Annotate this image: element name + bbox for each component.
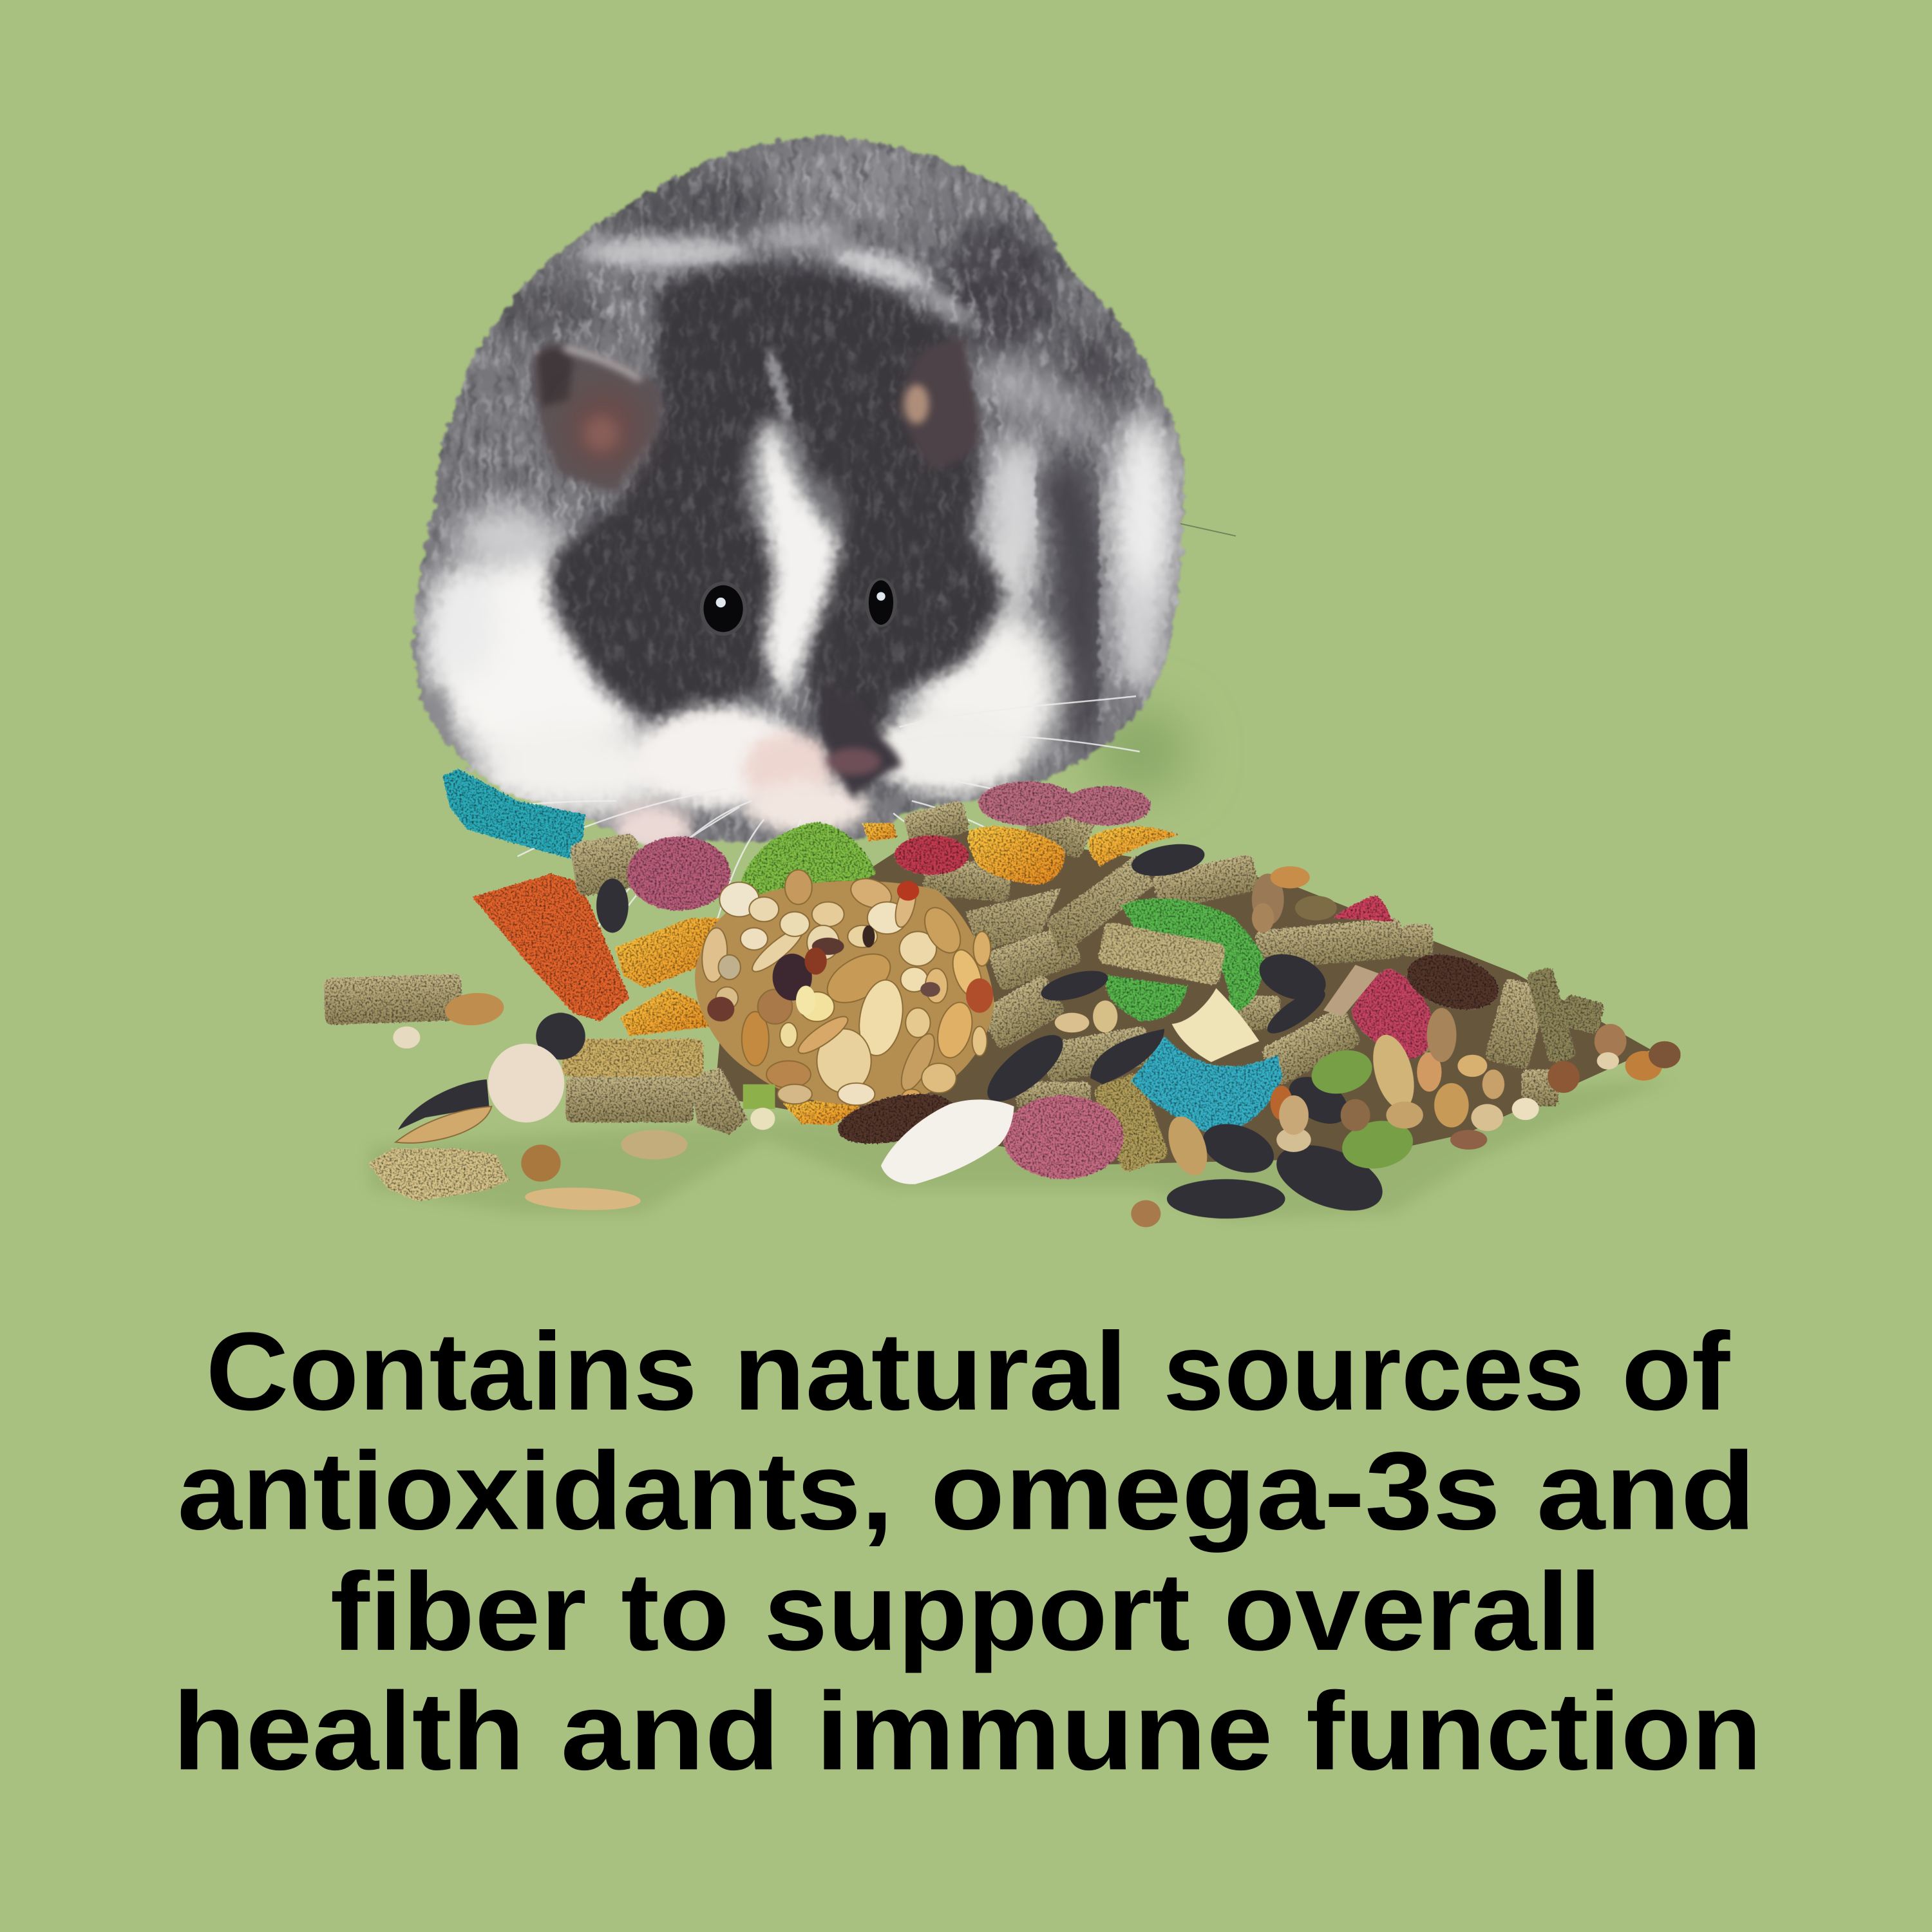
pellet over green piece [1097, 922, 1226, 986]
orange wedge [472, 874, 630, 1021]
golden pellet [562, 1039, 703, 1077]
nose bridge [819, 689, 902, 801]
black seeds [398, 839, 1391, 1224]
caption line 2 [178, 1429, 1756, 1553]
red top piece [1333, 895, 1392, 922]
caption line 3: fiber [330, 1550, 587, 1674]
white forehead blaze [762, 419, 838, 700]
fur streaks [394, 123, 1208, 862]
white striped seed [881, 1099, 1014, 1184]
raisins [833, 945, 1504, 1153]
right side dark stripe [1054, 462, 1082, 739]
hamster shadow [1090, 708, 1189, 795]
pea [488, 1044, 564, 1122]
cream piece [1172, 988, 1259, 1062]
thin forehead streak [769, 351, 788, 419]
pellets [323, 796, 1605, 1174]
pale patches across back [579, 236, 752, 269]
teal C piece [1131, 1036, 1283, 1133]
pale mottling around blaze [744, 419, 808, 542]
caption line 1: of [1622, 1310, 1730, 1434]
upper back shading [604, 166, 776, 240]
right cheek white [909, 606, 1062, 774]
caption line 4: function [1306, 1669, 1762, 1793]
caption line 4 [173, 1669, 1762, 1793]
caption line 2: omega-3s [931, 1429, 1501, 1553]
caption line 1: Contains [206, 1310, 697, 1434]
green seeds [743, 1044, 1417, 1174]
right ear [897, 336, 980, 469]
lower edge grey [419, 687, 448, 755]
caption line 3 [330, 1550, 1602, 1674]
left white belly [429, 542, 656, 776]
pile base [715, 826, 1651, 1164]
loose tan seeds [393, 866, 1681, 1227]
dark face mask [549, 265, 1005, 790]
teal piece under hamster [442, 769, 585, 859]
flat biscuit [368, 1148, 509, 1201]
pink ball front [1003, 1095, 1124, 1179]
raspberry piece [1352, 969, 1434, 1059]
nose [827, 748, 881, 775]
paw [614, 803, 692, 853]
caption line 2: and [1537, 1429, 1756, 1553]
red piece [895, 835, 969, 875]
hamster [394, 123, 1236, 936]
pink top pieces [978, 781, 1151, 826]
caption line 4: immune [816, 1669, 1273, 1793]
caption line 1: sources [1163, 1310, 1584, 1434]
food pile [323, 769, 1681, 1227]
caption line 3: overall [1224, 1550, 1602, 1674]
caption line 4: and [561, 1669, 780, 1793]
right side pale fur [986, 370, 1097, 419]
ground shadow [370, 1078, 1676, 1220]
muzzle [637, 706, 804, 810]
caption line 3: to [621, 1550, 730, 1674]
seed ball pieces [700, 870, 990, 1105]
caption line 4: health [173, 1669, 525, 1793]
seed ball [695, 870, 994, 1105]
whiskers [456, 696, 1140, 936]
caption line 1: natural [733, 1310, 1128, 1434]
tan seed on sunflower [395, 1106, 491, 1143]
pink ball left [627, 837, 731, 911]
caption line 3: support [764, 1550, 1190, 1674]
caption line 2: antioxidants, [178, 1429, 893, 1553]
left ear [532, 341, 662, 493]
stray dark whisker [1180, 524, 1236, 536]
corn kernels [615, 823, 1179, 1125]
streaks on mask [553, 270, 1005, 724]
fur body [394, 123, 1208, 862]
caption line 1 [206, 1310, 1730, 1434]
caption text [173, 1310, 1762, 1793]
left eye [700, 582, 746, 636]
pale right chest [982, 437, 1051, 573]
green C piece [1103, 898, 1264, 1021]
right eye [865, 578, 897, 627]
green ball [738, 822, 876, 905]
